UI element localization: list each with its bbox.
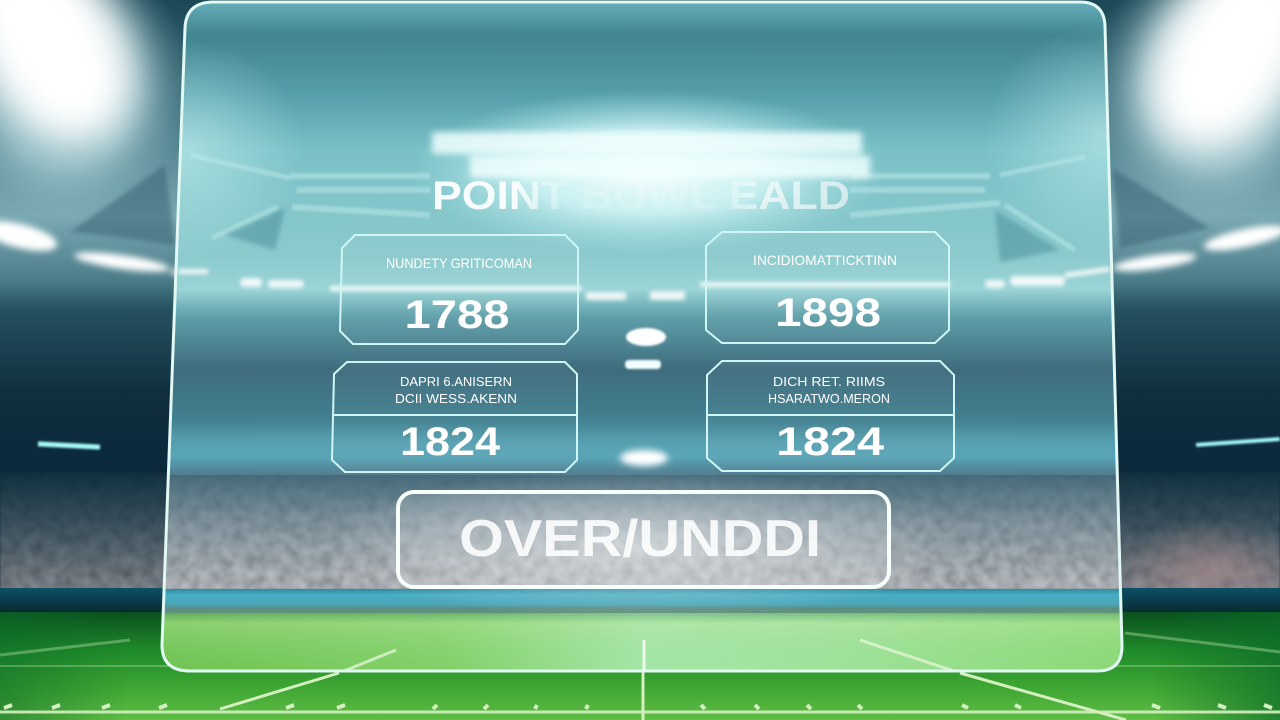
card: bottom left — [332, 362, 577, 472]
crowd through glass — [160, 475, 1125, 589]
crowd stands — [0, 472, 1280, 620]
scoreboard glow — [408, 90, 888, 254]
scoreboard lights — [432, 132, 870, 178]
teal accent light: right — [1196, 437, 1280, 447]
card: top right — [706, 232, 949, 343]
teal accent light: left — [38, 441, 100, 450]
haze — [160, 432, 1125, 462]
roof trusses: left — [70, 165, 175, 245]
field markings — [0, 633, 1280, 720]
light strip through glass — [178, 267, 1110, 300]
side glow in glass — [179, 52, 285, 236]
card: bottom left: 1824 — [400, 420, 501, 464]
over/under button: OVER/UNDDI — [459, 510, 821, 568]
floodlight halo: right — [1085, 0, 1280, 230]
card: bottom left: DAPRI 6.ANISERN — [400, 374, 512, 389]
roof trusses: right — [1112, 168, 1210, 248]
stadium light strip: right — [1112, 220, 1280, 275]
sideline band — [0, 588, 1280, 614]
over/under button — [398, 492, 889, 587]
card: bottom right: 1824 — [776, 420, 885, 464]
card: top right: INCIDIOMATTICKTINN — [753, 252, 897, 268]
button haze — [358, 477, 926, 612]
card: bottom right: HSARATWO.MERON — [768, 391, 890, 406]
title: POINT BOWL EALD — [432, 174, 850, 218]
stadium roof through glass — [190, 155, 1085, 250]
roof shadow through glass — [225, 208, 1060, 262]
floodlight: top left — [0, 0, 168, 171]
card: bottom left: DCII WESS.AKENN — [395, 391, 517, 406]
floodlight: top right — [1112, 0, 1280, 181]
floodlight halo: left — [0, 0, 195, 230]
stadium light strip: left — [0, 215, 210, 276]
center divider lights — [620, 328, 668, 466]
card: top left: NUNDETY GRITICOMAN — [386, 255, 532, 271]
card: bottom right: DICH RET. RIIMS — [773, 374, 885, 389]
sideline band through glass — [160, 589, 1125, 613]
card: top right: 1898 — [775, 291, 881, 335]
card: bottom right — [707, 361, 954, 471]
field line through glass — [339, 640, 960, 673]
card: top left: 1788 — [404, 293, 510, 337]
field through glass — [160, 613, 1125, 673]
green field — [0, 612, 1280, 720]
glass panel — [160, 0, 1124, 672]
card: top left — [340, 235, 578, 344]
